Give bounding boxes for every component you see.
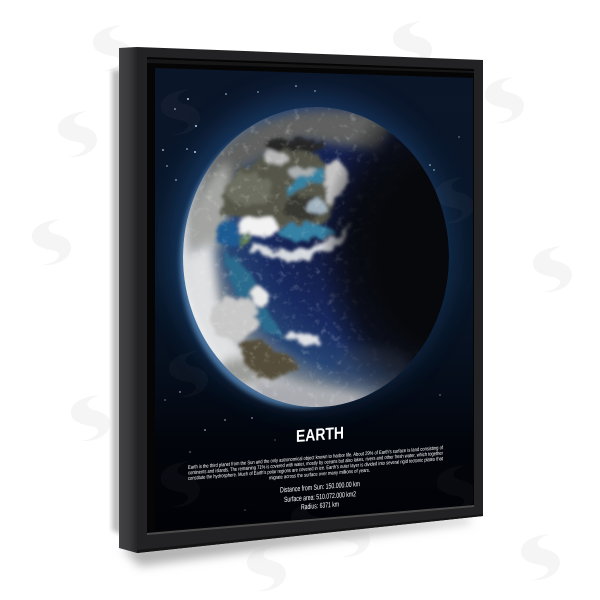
planet stats xyxy=(280,481,360,510)
Gulf of Mexico xyxy=(216,221,244,247)
description text: continents and islands. The remaining 71% is covered with water, mostly by oceans but also lakes, rivers and other fresh water, which together xyxy=(188,451,443,476)
description text: migrate across the surface over many millions of years. xyxy=(269,468,370,481)
title: EARTH xyxy=(296,423,344,446)
atmosphere glow xyxy=(170,95,450,405)
poster artwork xyxy=(155,68,473,520)
planet Earth xyxy=(180,105,450,415)
noise clouds xyxy=(190,107,424,407)
continents and clouds xyxy=(210,138,352,378)
stars xyxy=(162,85,460,510)
frame shadow xyxy=(112,70,470,566)
description text: Earth is the third planet from the Sun and the only astronomical object known to harbor life. About 29% of Earth's surface is land consisting of xyxy=(188,445,443,471)
night-side haze xyxy=(334,346,410,390)
Ocean cloud xyxy=(283,330,323,348)
north America land xyxy=(220,151,336,227)
space background xyxy=(155,68,473,507)
planet stats: Surface area: 510.072.000 km2 xyxy=(284,489,356,504)
Main cloud mass xyxy=(238,215,278,237)
Greenland ice xyxy=(327,162,351,204)
south American land xyxy=(238,339,299,378)
planet stats: Distance from Sun: 150.000.00 km xyxy=(280,479,360,494)
Caribbean cloud xyxy=(246,284,272,312)
cloud swirl arc xyxy=(250,222,352,260)
inner channel xyxy=(147,57,474,534)
Atlantic shelf teal xyxy=(278,223,334,241)
Hudson bay teal water xyxy=(285,168,326,198)
planet base sphere xyxy=(183,107,449,407)
planet stats: Radius: 6371 km xyxy=(301,499,339,511)
frame front face xyxy=(137,47,483,553)
frame xyxy=(119,47,483,553)
frame side face xyxy=(119,47,137,553)
hurricane swirl xyxy=(307,200,327,216)
central America shelf xyxy=(226,250,284,336)
description text xyxy=(188,445,443,482)
artwork watermarks xyxy=(161,89,476,547)
Canadian snow xyxy=(262,152,288,164)
South America clouds xyxy=(210,297,258,339)
north polar dark land xyxy=(265,138,325,154)
soft limb and polar tones xyxy=(184,109,395,415)
description text: constitute the hydrosphere. Much of Earth's polar regions are covered in ice. Earth's outer layer is divided into several rigid tectonic plates that xyxy=(188,456,443,482)
terminator shadow xyxy=(322,121,449,392)
